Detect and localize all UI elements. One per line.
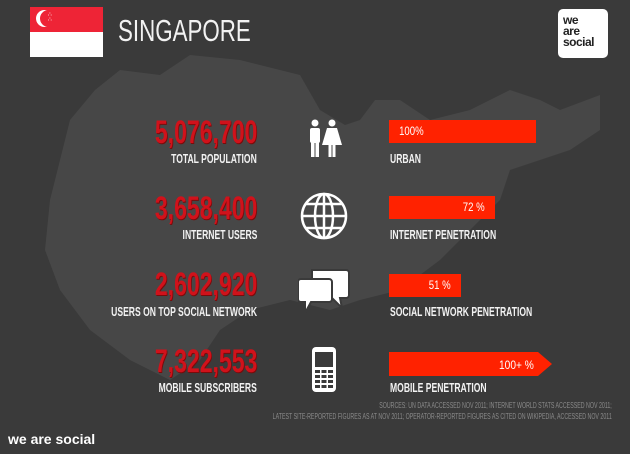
title: SINGAPORE [118,13,251,48]
row: internet: 3,658,400 [155,190,257,226]
logo: are [563,24,580,38]
row: internet [155,190,496,242]
row: social [111,266,532,319]
row: population: 100% [399,124,424,138]
row: mobile: MOBILE SUBSCRIBERS [159,380,257,395]
row: mobile: MOBILE PENETRATION [390,380,487,395]
flag: ∴ [48,17,52,23]
row: internet: INTERNET USERS [182,227,257,242]
row: internet: INTERNET PENETRATION [390,227,496,242]
icon: speech bubbles [298,269,350,309]
sources: LATEST SITE-REPORTED FIGURES AS AT NOV 2011; OPERATOR-REPORTED FIGURES AS CITED ON WIKIPEDIA, ACCESSED NOV 2011 [273,412,612,421]
row: mobile: 7,322,553 [155,343,257,379]
row: social: USERS ON TOP SOCIAL NETWORK [111,304,257,319]
row: population [155,114,536,166]
icon: globe [300,192,348,240]
icon: phone [312,347,336,392]
flag [30,7,103,57]
row: population: TOTAL POPULATION [171,151,257,166]
arrow bar: 100+ % [499,359,534,372]
row: population: URBAN [390,151,421,166]
row: internet: 72 % [462,200,484,214]
sources [273,401,612,421]
flag: ∴ [48,12,52,18]
logo: social [563,35,594,49]
row: social: 2,602,920 [155,266,257,302]
icon: people [310,120,342,157]
logo: we [563,13,578,27]
logo [558,9,608,58]
row: social: 51 % [428,278,450,292]
arrow bar [389,352,552,376]
row: population: 5,076,700 [155,114,257,150]
footer brand: we are social [8,431,95,447]
row: social: SOCIAL NETWORK PENETRATION [390,304,532,319]
row: mobile [155,343,552,395]
sources: SOURCES: UN DATA ACCESSED NOV 2011; INTERNET WORLD STATS ACCESSED NOV 2011; [379,401,612,410]
